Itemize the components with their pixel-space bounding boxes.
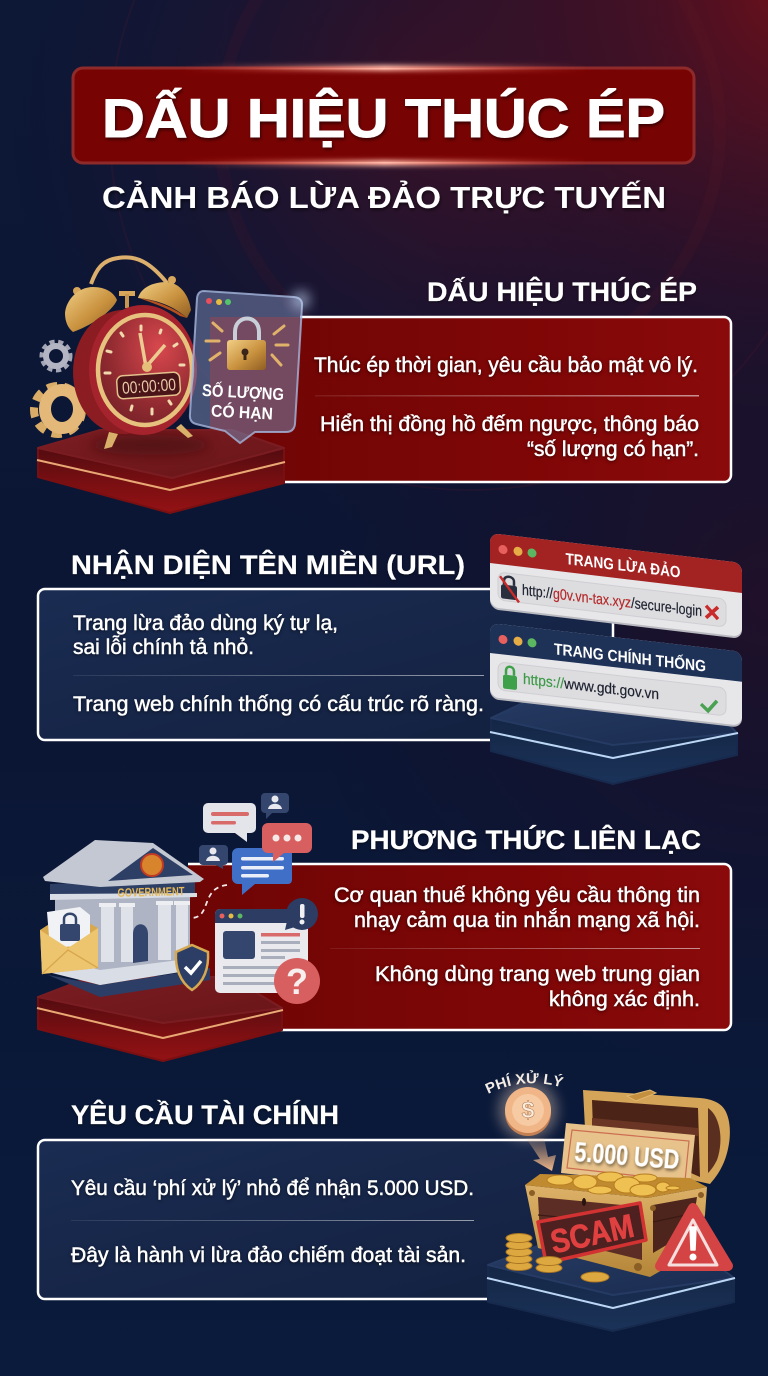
platform: navy <box>490 695 738 784</box>
heading: contact method: PHƯƠNG THỨC LIÊN LẠC <box>351 824 701 855</box>
text: contact line 3: Không dùng trang web trung gian <box>375 962 700 986</box>
text: financial line 1: Yêu cầu ‘phí xử lý’ nhỏ để nhận 5.000 USD. <box>71 1176 474 1200</box>
icon: silver gear <box>42 342 70 370</box>
text: pressure line 3: “số lượng có hạn”. <box>527 437 699 461</box>
icon: broken lock <box>500 576 519 602</box>
icon: fee coin: $ <box>522 1097 535 1123</box>
icon: green check <box>701 699 717 712</box>
icon: question badge: ? <box>286 961 308 1002</box>
icon: chest <box>525 1090 730 1277</box>
icon: fee coin <box>498 1080 558 1140</box>
icon: arrow from coin to chest <box>526 1138 556 1171</box>
text: URL line 2: sai lỗi chính tả nhỏ. <box>73 634 254 659</box>
subtitle: CẢNH BÁO LỪA ĐẢO TRỰC TUYẾN <box>102 179 666 215</box>
panel: contact method <box>188 864 731 1030</box>
fee label: PHÍ XỬ LÝ <box>484 1070 564 1094</box>
ticket <box>561 1123 695 1187</box>
section 3: contact method <box>37 793 731 1061</box>
panel: URL recognition <box>38 589 613 740</box>
section 4: financial demand <box>36 1070 736 1332</box>
icon: user bubble top <box>261 793 289 819</box>
callout text: CÓ HẠN <box>211 401 273 424</box>
scam URL: http://g0v.vn-tax.xyz/secure-login <box>522 582 702 620</box>
icon: government building <box>43 840 210 997</box>
icon: gold gear <box>34 386 82 434</box>
platform: red <box>37 430 285 513</box>
text: contact line 1: Cơ quan thuế không yêu cầu thông tin <box>334 883 700 907</box>
official URL: https://www.gdt.gov.vn <box>523 671 659 703</box>
heading: financial demand: YÊU CẦU TÀI CHÍNH <box>71 1099 339 1130</box>
callout text: SỐ LƯỢNG <box>202 380 284 404</box>
icon: padlock <box>206 318 288 370</box>
icon: warning triangle <box>660 1208 728 1266</box>
glass callout: limited quantity <box>190 291 310 443</box>
heading: pressure signs: DẤU HIỆU THÚC ÉP <box>427 276 697 307</box>
browser: official site <box>490 623 742 728</box>
text: pressure line 2: Hiển thị đồng hồ đếm ngược, thông báo <box>320 412 699 436</box>
text: contact line 2: nhạy cảm qua tin nhắn mạng xã hội. <box>354 907 700 932</box>
platform: red <box>37 977 283 1061</box>
ticket amount: 5.000 USD <box>573 1136 681 1175</box>
text: pressure line 1: Thúc ép thời gian, yêu cầu bảo mật vô lý. <box>314 353 698 377</box>
browser title: TRANG CHÍNH THỐNG <box>554 638 706 676</box>
icon: question badge <box>274 958 320 1004</box>
title: DẤU HIỆU THÚC ÉP <box>102 87 665 149</box>
icon: envelope with lock <box>40 907 98 974</box>
icon: coin stacks <box>506 1234 609 1282</box>
dashed connector <box>191 885 227 918</box>
text: URL line 3: Trang web chính thống có cấu trúc rõ ràng. <box>73 692 484 716</box>
icon: shield check <box>176 945 208 990</box>
icon: red chat bubble <box>262 823 312 862</box>
icon: user bubble left <box>199 845 228 869</box>
clock digits: 00:00:00 <box>121 375 177 398</box>
icon: web window <box>215 909 308 993</box>
heading: URL recognition: NHẬN DIỆN TÊN MIỀN (URL) <box>71 549 465 580</box>
icon: alarm clock <box>65 257 197 449</box>
icon: white chat bubble <box>203 803 256 842</box>
section 1: pressure signs <box>34 257 731 513</box>
browser: scam site <box>490 533 742 639</box>
title banner <box>73 65 694 166</box>
building sign: GOVERNMENT <box>117 884 185 900</box>
platform: navy <box>487 1245 735 1331</box>
browser title: TRANG LỪA ĐẢO <box>566 549 680 582</box>
text: URL line 1: Trang lừa đảo dùng ký tự lạ, <box>73 611 338 635</box>
panel: pressure signs <box>210 317 731 482</box>
icon: exclamation badge <box>285 898 318 930</box>
stamp: scam <box>538 1203 646 1263</box>
section 2: URL recognition <box>38 533 742 784</box>
text: financial line 2: Đây là hành vi lừa đảo chiếm đoạt tài sản. <box>71 1243 466 1267</box>
icon: blue chat bubble <box>232 848 292 895</box>
text: contact line 4: không xác định. <box>549 987 700 1011</box>
panel: financial demand <box>38 1140 618 1299</box>
icon: green lock <box>503 666 517 690</box>
stamp text: SCAM <box>547 1207 637 1260</box>
icon: red cross <box>706 606 718 619</box>
